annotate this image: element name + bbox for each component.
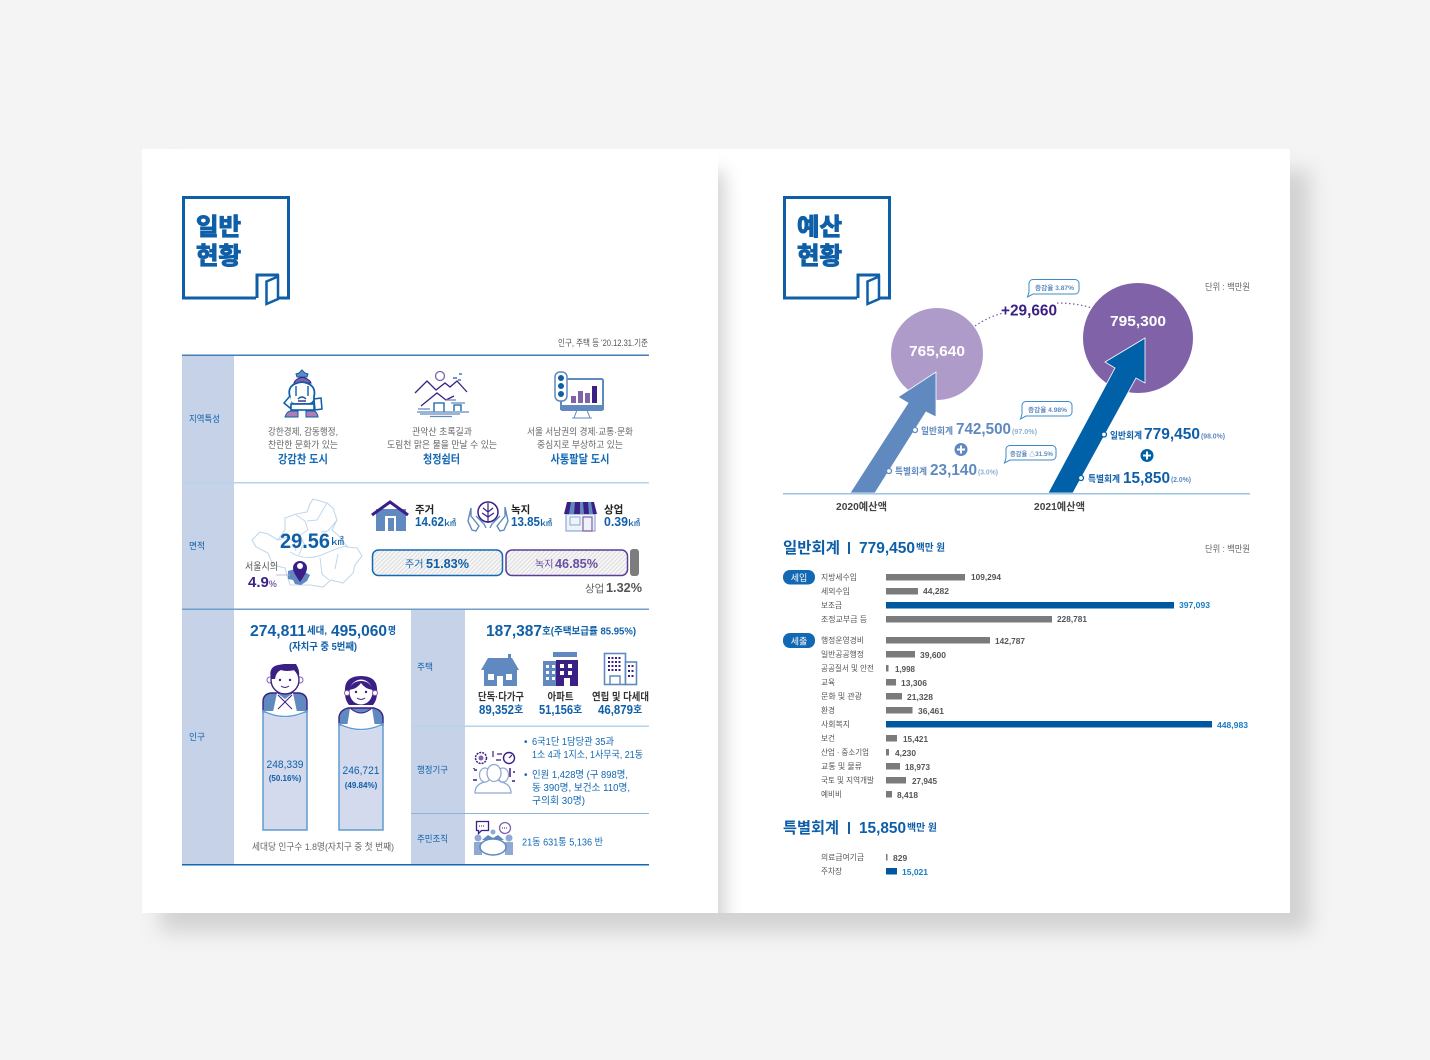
bar chart: expenditure: 1,998 bbox=[895, 664, 915, 674]
stat: commercial area: 상업 bbox=[604, 503, 623, 516]
stat: detached houses bbox=[478, 690, 524, 717]
stat: households and population bbox=[250, 623, 396, 653]
callout: change rate 3.87% bbox=[1028, 280, 1079, 297]
text: administrative organization: 1소 4과 1지소, 1사무국, 21동 bbox=[532, 749, 643, 761]
bar chart: expenditure: 국토 및 지역개발 bbox=[821, 775, 875, 785]
bar chart: expenditure: 39,600 bbox=[920, 650, 946, 660]
stat: green area bbox=[511, 504, 552, 529]
row label: regional traits: 지역특성 bbox=[189, 414, 220, 424]
bar chart: expenditure: 142,787 bbox=[995, 636, 1025, 646]
dotted connector and increase: +29,660 bbox=[1001, 302, 1057, 320]
2021 general account bbox=[1102, 426, 1225, 443]
stat: row houses: 46,879 bbox=[598, 702, 633, 717]
icon: traffic light and monitor bbox=[555, 372, 604, 418]
row label: housing: 주택 bbox=[417, 662, 433, 672]
circle: 2021 total: 795,300 bbox=[1110, 314, 1166, 330]
bar chart: expenditure: 문화 및 관광 bbox=[821, 691, 863, 701]
stat: row houses: 연립 및 다세대 bbox=[592, 690, 649, 703]
icon: mountains and stream bbox=[415, 372, 469, 416]
share bar: residential: 주거 bbox=[405, 558, 423, 570]
caption: clean shelter: 도림천 맑은 물을 만날 수 있는 bbox=[387, 439, 497, 451]
bar chart: expenditure: 환경 bbox=[821, 705, 835, 715]
bar chart: expenditure: 공공질서 및 안전 bbox=[821, 663, 874, 673]
row label: resident organizations: 주민조직 bbox=[417, 834, 448, 844]
text: administrative organization: 인원 1,428명 (구 898명, bbox=[532, 769, 628, 781]
unit note: 단위 : 백만원 bbox=[1205, 282, 1250, 292]
stat: total area: 29.56 bbox=[280, 530, 330, 553]
pill: expenditure bbox=[783, 633, 815, 648]
caption: well-connected city: 서울 서남권의 경제·교통·문화 bbox=[527, 426, 633, 438]
icon: general statue bbox=[284, 370, 322, 417]
bar chart: special account: 15,021 bbox=[902, 867, 928, 877]
bar chart: special account: 의료급여기금 bbox=[821, 852, 864, 862]
icon: shop bbox=[564, 502, 597, 531]
stat: households and population: (자치구 중 5번째) bbox=[289, 640, 357, 653]
bar chart: expenditure: 27,945 bbox=[912, 776, 937, 786]
bar chart: revenue: 보조금 bbox=[821, 601, 842, 610]
title box: budget status: 예산 bbox=[797, 214, 842, 241]
stat: row houses bbox=[592, 690, 649, 717]
2021 general account: 일반회계 bbox=[1110, 430, 1142, 440]
icon: administrative staff bbox=[473, 751, 515, 793]
2021 special account: 특별회계 bbox=[1088, 473, 1120, 484]
stat: commercial area: 0.39 bbox=[604, 514, 628, 529]
axis label 2021: 2021예산액 bbox=[1034, 500, 1085, 513]
bar chart: expenditure: 행정운영경비 bbox=[821, 635, 864, 645]
stat: commercial area: ㎢ bbox=[628, 518, 640, 528]
stat: share of Seoul: 서울시의 bbox=[245, 561, 278, 573]
caption: well-connected city bbox=[527, 426, 633, 466]
2020 general account bbox=[912, 421, 1037, 438]
icon: apartment bbox=[543, 652, 578, 686]
callout: change rate minus 31.5%: 증감율 △31.5% bbox=[1010, 449, 1053, 458]
row label: administration: 행정기구 bbox=[417, 764, 448, 775]
stat: residential area: ㎢ bbox=[444, 518, 456, 528]
row label: area: 면적 bbox=[189, 540, 205, 551]
2021 special account bbox=[1078, 470, 1191, 487]
bar chart: special account bbox=[821, 852, 928, 877]
bar chart: expenditure: 일반공공행정 bbox=[821, 649, 864, 659]
bar chart: expenditure: 보건 bbox=[821, 733, 835, 743]
bar chart: special account: 829 bbox=[893, 853, 907, 863]
2021 general account: 779,450 bbox=[1144, 426, 1200, 443]
pill: revenue: 세입 bbox=[791, 572, 807, 583]
bar chart: revenue: 세외수입 bbox=[821, 586, 850, 596]
share bar: residential bbox=[372, 550, 502, 576]
share bar: green: 녹지 bbox=[535, 558, 553, 570]
note: persons per household: 세대당 인구수 1.8명(자치구 중 첫 번째) bbox=[252, 841, 394, 853]
bar chart: revenue bbox=[821, 572, 1210, 624]
stat: residential area bbox=[415, 503, 456, 529]
callout: change rate 3.87%: 증감율 3.87% bbox=[1035, 283, 1074, 292]
text: administrative organization: • bbox=[524, 770, 528, 781]
plus icon 2020 bbox=[954, 443, 968, 456]
bar chart: special account: 주차장 bbox=[821, 866, 843, 876]
bar chart: revenue: 397,093 bbox=[1179, 600, 1210, 610]
chart: female population column bbox=[339, 676, 383, 830]
bar chart: expenditure: 사회복지 bbox=[821, 720, 850, 729]
caption: clean shelter bbox=[387, 426, 497, 466]
stat: apartments: 호 bbox=[573, 704, 582, 716]
bar chart: expenditure: 13,306 bbox=[901, 678, 927, 688]
bar chart: expenditure: 산업 · 중소기업 bbox=[821, 747, 869, 757]
title box: general status: 현황 bbox=[196, 243, 241, 270]
caption: Gang Gam-chan city: 강한경제, 감동행정, bbox=[268, 426, 338, 438]
panel: budget status page bbox=[690, 149, 1290, 952]
bar chart: revenue: 228,781 bbox=[1057, 614, 1087, 624]
unit note: 단위 : 백만원 bbox=[1205, 544, 1250, 554]
chart: male population column bbox=[263, 664, 307, 830]
dotted connector and increase bbox=[975, 302, 1092, 326]
2021 general account: (98.0%) bbox=[1201, 434, 1225, 440]
stat: households and population: 274,811 bbox=[250, 623, 306, 640]
caption: Gang Gam-chan city bbox=[268, 426, 338, 466]
text: resident organization: 21동 631통 5,136 반 bbox=[522, 836, 603, 848]
caption: clean shelter: 청정쉼터 bbox=[423, 452, 460, 466]
stat: housing units: 187,387 bbox=[486, 623, 542, 640]
chart: male population column: 248,339 bbox=[266, 759, 304, 771]
callout: change rate 4.98%: 증감율 4.98% bbox=[1028, 405, 1067, 414]
stat: residential area: 주거 bbox=[415, 503, 434, 516]
stat: detached houses: 89,352 bbox=[479, 702, 514, 717]
icon: detached house bbox=[481, 654, 519, 686]
bar chart: expenditure: 8,418 bbox=[897, 790, 918, 800]
2020 special account: (3.0%) bbox=[978, 470, 998, 476]
share bar: green: 46.85% bbox=[555, 556, 598, 571]
stat: green area: 13.85 bbox=[511, 514, 540, 529]
row label: population: 인구 bbox=[189, 732, 205, 742]
bar chart: expenditure: 21,328 bbox=[907, 692, 933, 702]
arrow: 2020 budget bbox=[850, 372, 936, 493]
2020 general account: 일반회계 bbox=[921, 425, 953, 436]
text: administrative organization bbox=[524, 736, 643, 807]
bar chart: revenue: 109,294 bbox=[971, 572, 1001, 582]
share bar: commercial bbox=[585, 549, 642, 595]
stat: households and population: 세대, bbox=[307, 624, 327, 637]
chart: female population column: (49.84%) bbox=[345, 781, 378, 790]
bar chart: expenditure: 교통 및 물류 bbox=[821, 761, 862, 771]
bar chart: revenue: 44,282 bbox=[923, 586, 949, 596]
stat: total area: ㎢ bbox=[331, 536, 344, 548]
heading: general account: 779,450 bbox=[859, 540, 915, 557]
caption: Gang Gam-chan city: 강감찬 도시 bbox=[278, 452, 328, 466]
2020 special account: 특별회계 bbox=[895, 466, 927, 476]
stat: households and population: 495,060 bbox=[331, 623, 387, 640]
circle: 2020 total bbox=[891, 308, 983, 400]
stat: apartments bbox=[539, 690, 582, 717]
share bar: green bbox=[506, 550, 628, 576]
heading: special account: 15,850 bbox=[859, 820, 906, 837]
chart: female population column: 246,721 bbox=[342, 765, 380, 777]
share bar: commercial: 상업 bbox=[585, 582, 604, 595]
2021 special account: (2.0%) bbox=[1171, 477, 1191, 484]
table sidebar bands bbox=[182, 355, 465, 864]
bar chart: expenditure: 448,983 bbox=[1217, 720, 1248, 730]
2020 general account: 742,500 bbox=[956, 421, 1011, 438]
title box: general status bbox=[184, 198, 288, 304]
stat: apartments: 51,156 bbox=[539, 702, 573, 717]
stat: commercial area bbox=[604, 503, 640, 529]
map: Seoul districts bbox=[252, 499, 362, 587]
bar chart: revenue: 지방세수입 bbox=[821, 572, 857, 582]
heading: special account bbox=[783, 819, 937, 837]
panel: general status page bbox=[142, 149, 718, 913]
bar chart: expenditure bbox=[821, 635, 1248, 800]
caption: well-connected city: 사통팔달 도시 bbox=[550, 453, 610, 466]
bar chart: expenditure: 예비비 bbox=[821, 789, 842, 799]
share bar: residential: 51.83% bbox=[426, 556, 469, 571]
axis label 2020: 2020예산액 bbox=[836, 500, 887, 513]
text: administrative organization: • bbox=[524, 737, 528, 748]
stat: green area: ㎢ bbox=[540, 518, 552, 528]
title box: general status: 일반 bbox=[196, 214, 241, 241]
bar chart: expenditure: 18,973 bbox=[905, 762, 930, 772]
2021 special account: 15,850 bbox=[1123, 470, 1170, 487]
stat: share of Seoul: 4.9% bbox=[248, 574, 277, 591]
pill: revenue bbox=[783, 570, 815, 584]
reference date note: 인구, 주택 등 '20.12.31.기준 bbox=[558, 338, 648, 348]
share bar: commercial: 1.32% bbox=[606, 580, 642, 595]
stat: green area: 녹지 bbox=[511, 504, 530, 516]
stat: detached houses: 단독·다가구 bbox=[478, 690, 524, 703]
arrow: 2021 budget bbox=[1048, 338, 1145, 493]
bar chart: revenue: 조정교부금 등 bbox=[821, 614, 867, 624]
bar chart: expenditure: 교육 bbox=[821, 678, 835, 687]
caption: well-connected city: 중심지로 부상하고 있는 bbox=[537, 439, 623, 451]
heading: general account: 백만 원 bbox=[916, 541, 945, 554]
bar chart: expenditure: 36,461 bbox=[918, 706, 944, 716]
circle: 2020 total: 765,640 bbox=[909, 344, 965, 360]
bar chart: expenditure: 4,230 bbox=[895, 748, 916, 758]
heading: special account: 백만 원 bbox=[907, 821, 937, 834]
heading: general account: 일반회계 bbox=[783, 539, 840, 557]
2020 special account: 23,140 bbox=[930, 462, 977, 479]
bar chart: expenditure: 15,421 bbox=[903, 734, 928, 744]
circle: 2021 total bbox=[1083, 283, 1193, 393]
text: administrative organization: 6국1단 1담당관 35과 bbox=[532, 736, 614, 748]
stat: residential area: 14.62 bbox=[415, 514, 444, 529]
text: administrative organization: 동 390명, 보건소 110명, bbox=[532, 782, 630, 794]
stat: housing units: 호(주택보급률 85.95%) bbox=[542, 626, 636, 638]
stat: households and population: 명 bbox=[388, 625, 396, 637]
callout: change rate minus 31.5% bbox=[1004, 446, 1056, 463]
icon: row housing bbox=[604, 654, 636, 684]
caption: Gang Gam-chan city: 찬란한 문화가 있는 bbox=[268, 439, 338, 451]
stat: housing units bbox=[486, 623, 636, 640]
stat: apartments: 아파트 bbox=[548, 690, 574, 703]
stat: detached houses: 호 bbox=[514, 704, 523, 716]
pill: expenditure: 세출 bbox=[791, 636, 807, 646]
caption: clean shelter: 관악산 초록길과 bbox=[412, 426, 472, 438]
text: administrative organization: 구의회 30명) bbox=[532, 795, 585, 807]
icon: hands holding leaf bbox=[468, 502, 508, 531]
heading: general account bbox=[783, 539, 945, 557]
heading: special account: 특별회계 bbox=[783, 819, 839, 837]
callout: change rate 4.98% bbox=[1020, 402, 1072, 419]
icon: residents meeting bbox=[474, 822, 513, 855]
plus icon 2021 bbox=[1140, 449, 1154, 462]
chart: male population column: (50.16%) bbox=[269, 774, 302, 783]
title box: budget status bbox=[784, 198, 890, 304]
2020 general account: (97.0%) bbox=[1012, 429, 1037, 436]
icon: house bbox=[372, 502, 408, 531]
stat: share of Seoul bbox=[245, 561, 278, 591]
2020 special account bbox=[886, 462, 998, 479]
title box: budget status: 현황 bbox=[797, 243, 842, 270]
stat: row houses: 호 bbox=[633, 704, 642, 716]
